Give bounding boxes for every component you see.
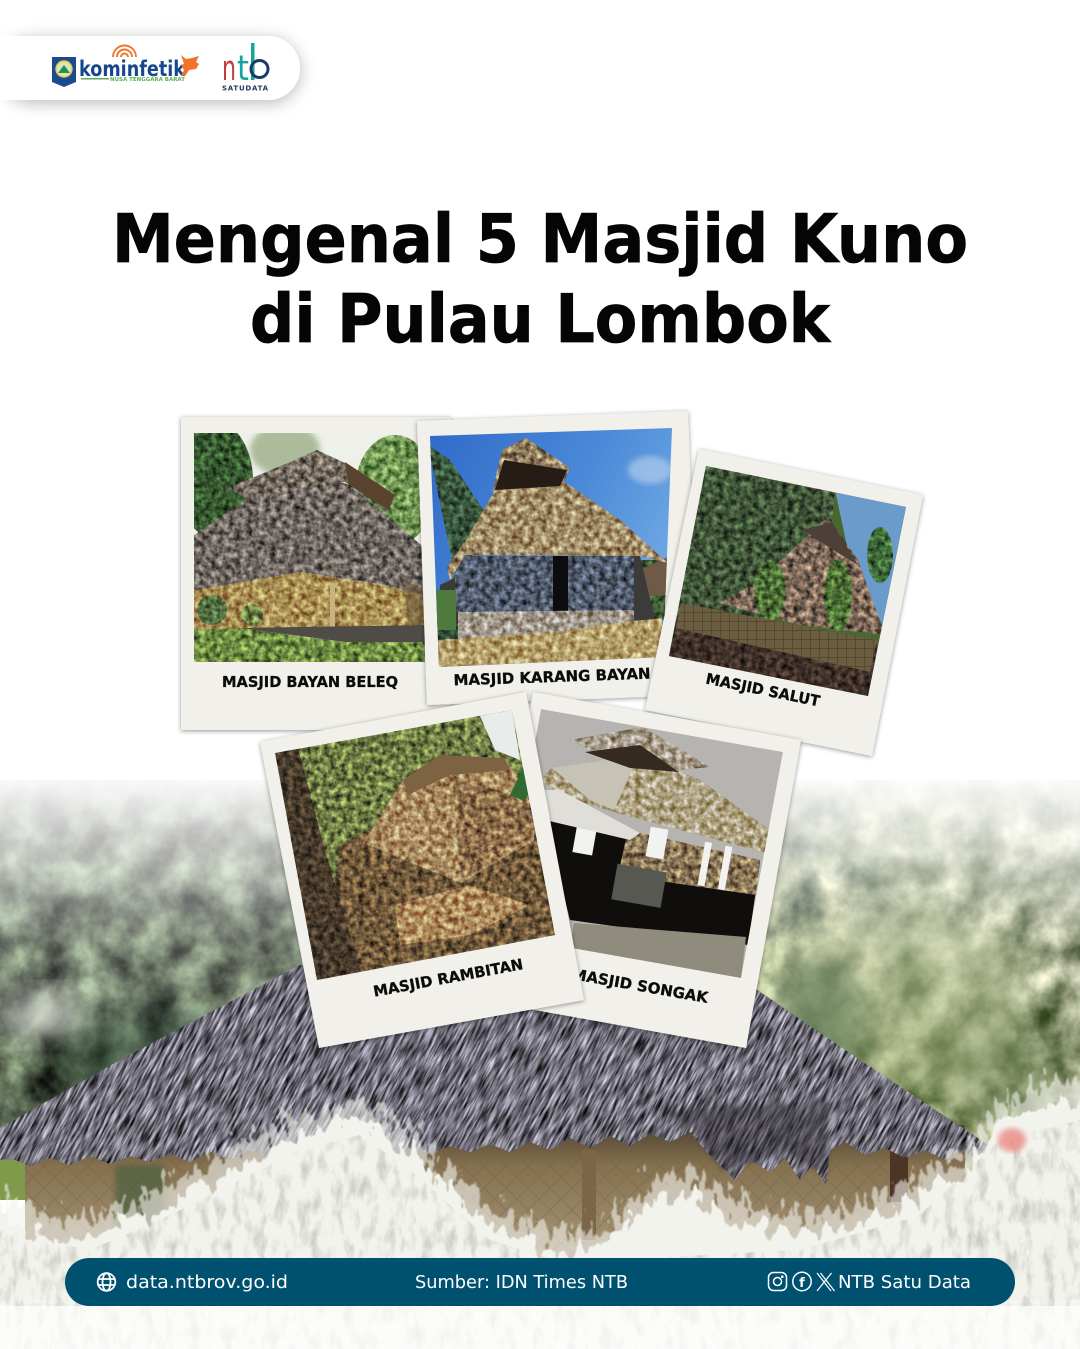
NTB Satu Data logo: n (222, 49, 236, 89)
icon: X (817, 1273, 834, 1291)
photo card: Masjid Karang Bayan (417, 411, 698, 705)
photo: Bayan Beleq (194, 433, 425, 662)
source: Sumber: IDN Times NTB (415, 1272, 628, 1293)
NTB Satu Data logo (222, 43, 269, 92)
subtitle line: NUSA TENGGARA BARAT (110, 77, 186, 83)
thatched roof (0, 965, 990, 1185)
photo: Karang Bayan (425, 425, 675, 670)
icon: orange signal arcs (113, 46, 136, 57)
wordmark: kominfetik (79, 57, 186, 81)
photo card: Masjid Songak (525, 690, 804, 1051)
icon: NTB provincial shield (52, 57, 76, 87)
photo: Salut (660, 460, 910, 700)
photo card: Masjid Bayan Beleq (177, 417, 451, 730)
forest behind mosque (0, 770, 1080, 1200)
photo card: Masjid Rambitan (260, 692, 584, 1048)
icon: orange deer (181, 55, 199, 76)
icon: instagram (768, 1272, 786, 1290)
title: di Pulau Lombok (250, 280, 831, 358)
label: MASJID KARANG BAYAN (453, 665, 651, 689)
header logo pill (0, 36, 300, 100)
icon: facebook (793, 1272, 811, 1291)
website: data.ntbrov.go.id (126, 1272, 288, 1293)
label: MASJID BAYAN BELEQ (222, 673, 398, 691)
icon: globe (98, 1273, 115, 1291)
white mist foreground (0, 1080, 1080, 1349)
icon: facebook: f (799, 1276, 805, 1291)
NTB Satu Data logo: t (237, 49, 249, 89)
label: MASJID SONGAK (570, 965, 711, 1007)
bamboo wall (0, 1125, 965, 1260)
label: MASJID RAMBITAN (372, 955, 525, 1001)
photo: Rambitan (275, 710, 560, 985)
label: MASJID SALUT (704, 670, 822, 711)
footer bar (65, 1258, 1015, 1306)
title (112, 200, 968, 358)
background scene: old mosque photograph (0, 770, 1080, 1349)
title: Mengenal 5 Masjid Kuno (112, 200, 968, 278)
photo card: Masjid Salut (645, 449, 923, 756)
NTB Satu Data logo: SATUDATA (222, 84, 269, 92)
social handle: NTB Satu Data (838, 1272, 971, 1293)
kominfotik logo (79, 46, 199, 83)
photo: Songak (535, 709, 783, 978)
